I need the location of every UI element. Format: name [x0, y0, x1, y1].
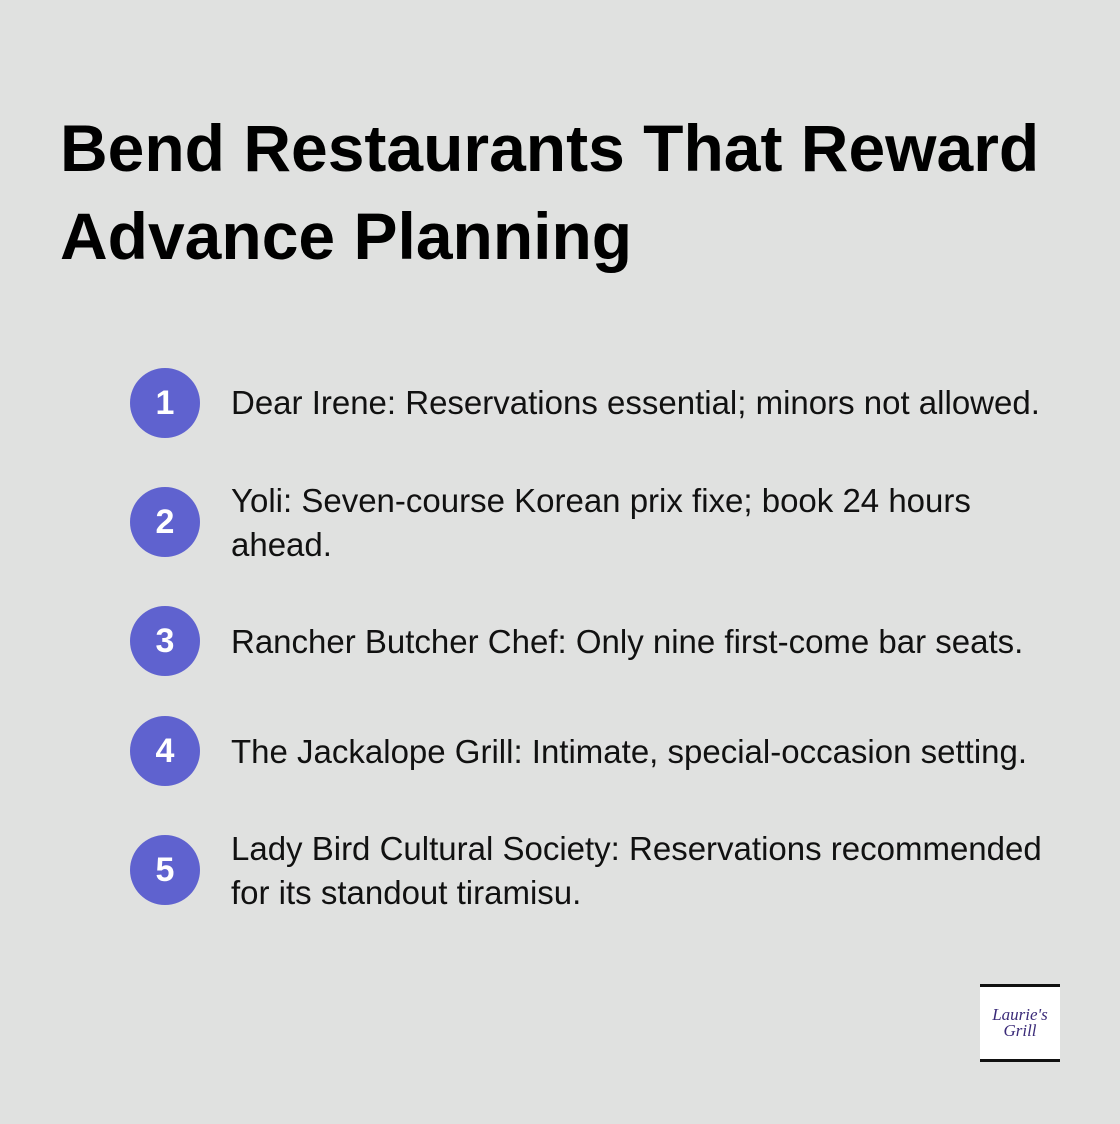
title: Advance Planning — [60, 199, 632, 273]
number circle 5 — [130, 835, 200, 905]
number circle 4: 4 — [156, 732, 174, 770]
logo — [980, 984, 1060, 1062]
number circle 1: 1 — [156, 384, 174, 422]
number circle 3: 3 — [156, 622, 174, 660]
logo: Laurie's — [992, 1005, 1048, 1024]
number circle 1 — [130, 368, 200, 438]
text 5: Lady Bird Cultural Society: Reservations recommended for its standout tiramisu. — [231, 830, 1042, 911]
number circle 2: 2 — [156, 503, 174, 541]
text 1: Dear Irene: Reservations essential; minors not allowed. — [231, 384, 1040, 421]
item 5 — [130, 830, 1042, 911]
item 4 — [130, 716, 1027, 786]
item 3 — [130, 606, 1023, 676]
logo: Grill — [1003, 1021, 1037, 1040]
number circle 4 — [130, 716, 200, 786]
title: Bend Restaurants That Reward — [60, 111, 1039, 185]
number circle 3 — [130, 606, 200, 676]
item 1 — [130, 368, 1040, 438]
item 2 — [130, 482, 971, 563]
text 3: Rancher Butcher Chef: Only nine first-come bar seats. — [231, 623, 1023, 660]
title — [60, 111, 1039, 273]
number circle 5: 5 — [156, 851, 174, 889]
text 4: The Jackalope Grill: Intimate, special-occasion setting. — [231, 733, 1027, 770]
text 2: Yoli: Seven-course Korean prix fixe; book 24 hours ahead. — [231, 482, 971, 563]
number circle 2 — [130, 487, 200, 557]
